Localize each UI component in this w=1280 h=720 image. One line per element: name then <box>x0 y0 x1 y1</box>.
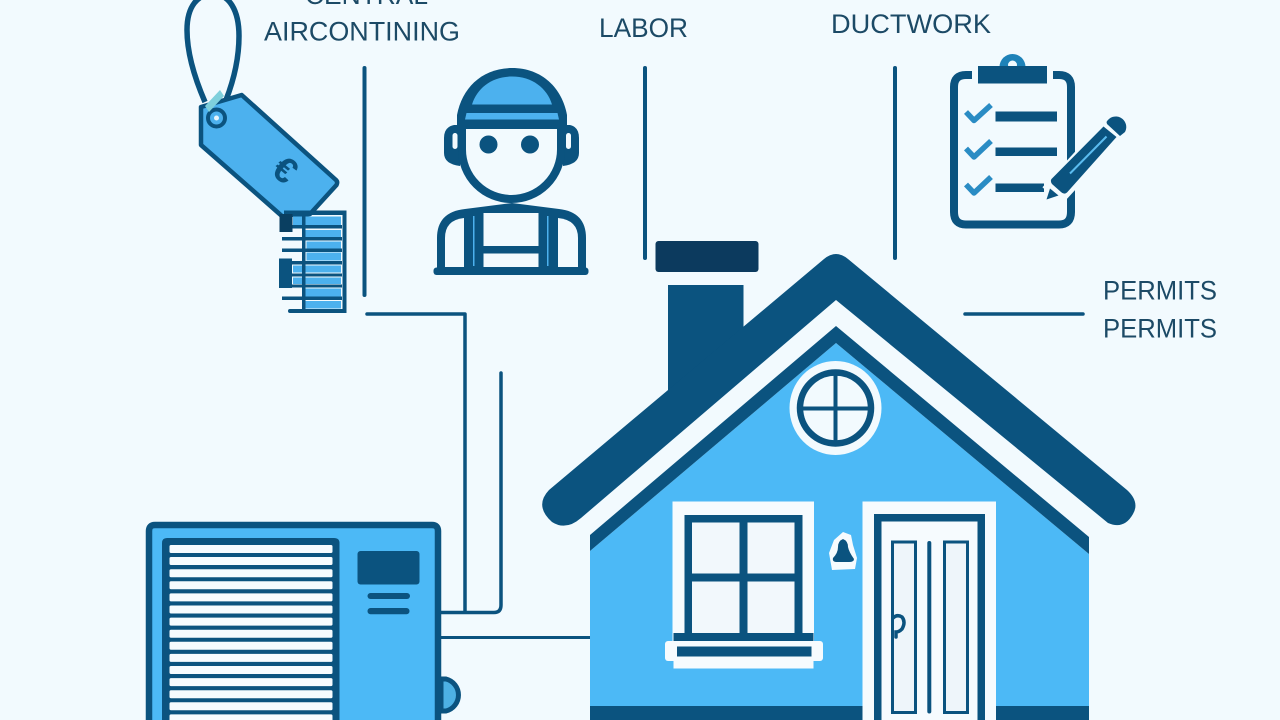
clip <box>978 54 1047 84</box>
front door <box>862 502 996 720</box>
icon: price tag with euro sign: € <box>264 147 306 192</box>
chimney <box>656 241 758 410</box>
louver grille <box>162 538 340 720</box>
face <box>462 125 561 199</box>
heading: ductwork: DUCTWORK <box>831 9 991 39</box>
house <box>542 241 1135 720</box>
heading: permits <box>1103 276 1217 344</box>
hard hat <box>457 68 567 128</box>
side bump <box>441 679 458 711</box>
clipboard board <box>954 75 1071 224</box>
ears / headset <box>444 125 579 166</box>
doorbell <box>829 532 857 570</box>
connector lines <box>364 68 1083 638</box>
heading: central air conditioning <box>264 0 460 46</box>
roof <box>542 254 1135 526</box>
door handle <box>893 616 904 637</box>
heading: labor: LABOR <box>599 13 688 43</box>
check marks <box>966 105 991 193</box>
heading: permits: PERMITS <box>1103 276 1217 306</box>
house wall <box>590 343 1089 720</box>
AC outdoor unit <box>149 525 458 720</box>
barcode block <box>279 210 346 313</box>
heading: permits: PERMITS <box>1103 314 1217 344</box>
list lines <box>996 112 1057 192</box>
icon: price tag with euro sign <box>187 0 346 313</box>
pencil <box>1046 116 1126 200</box>
front window <box>665 502 823 668</box>
body and overalls <box>434 203 588 275</box>
foundation band <box>590 706 1089 720</box>
heading: central air conditioning: AIRCONTINING <box>264 16 460 46</box>
window sill <box>665 641 823 668</box>
icon: worker with hard hat <box>434 68 588 275</box>
round attic window <box>790 361 882 455</box>
control display <box>358 551 420 614</box>
icon: checklist clipboard with pencil <box>954 54 1126 224</box>
inner gable trim <box>590 326 1089 554</box>
casing <box>149 525 438 720</box>
